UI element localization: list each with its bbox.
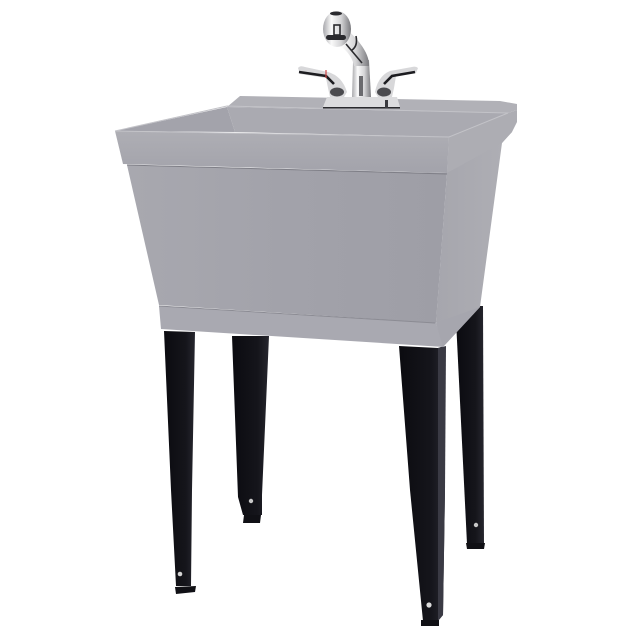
spray head	[323, 11, 351, 47]
body side	[436, 132, 512, 347]
basin interior left wall	[115, 107, 235, 132]
spout body	[352, 60, 371, 97]
front rim	[115, 131, 449, 173]
back right leg	[456, 306, 485, 549]
spout neck	[331, 26, 369, 66]
base plate	[323, 97, 400, 107]
front right leg	[399, 346, 446, 626]
right handle	[375, 67, 418, 97]
faucet	[298, 11, 418, 108]
basin interior back wall	[227, 107, 508, 137]
left handle	[298, 66, 347, 97]
rear deck	[227, 96, 517, 113]
body front	[127, 165, 447, 323]
front left leg	[164, 331, 196, 594]
sink tub	[115, 96, 517, 347]
bottom band	[159, 306, 444, 347]
back left leg	[232, 336, 269, 523]
